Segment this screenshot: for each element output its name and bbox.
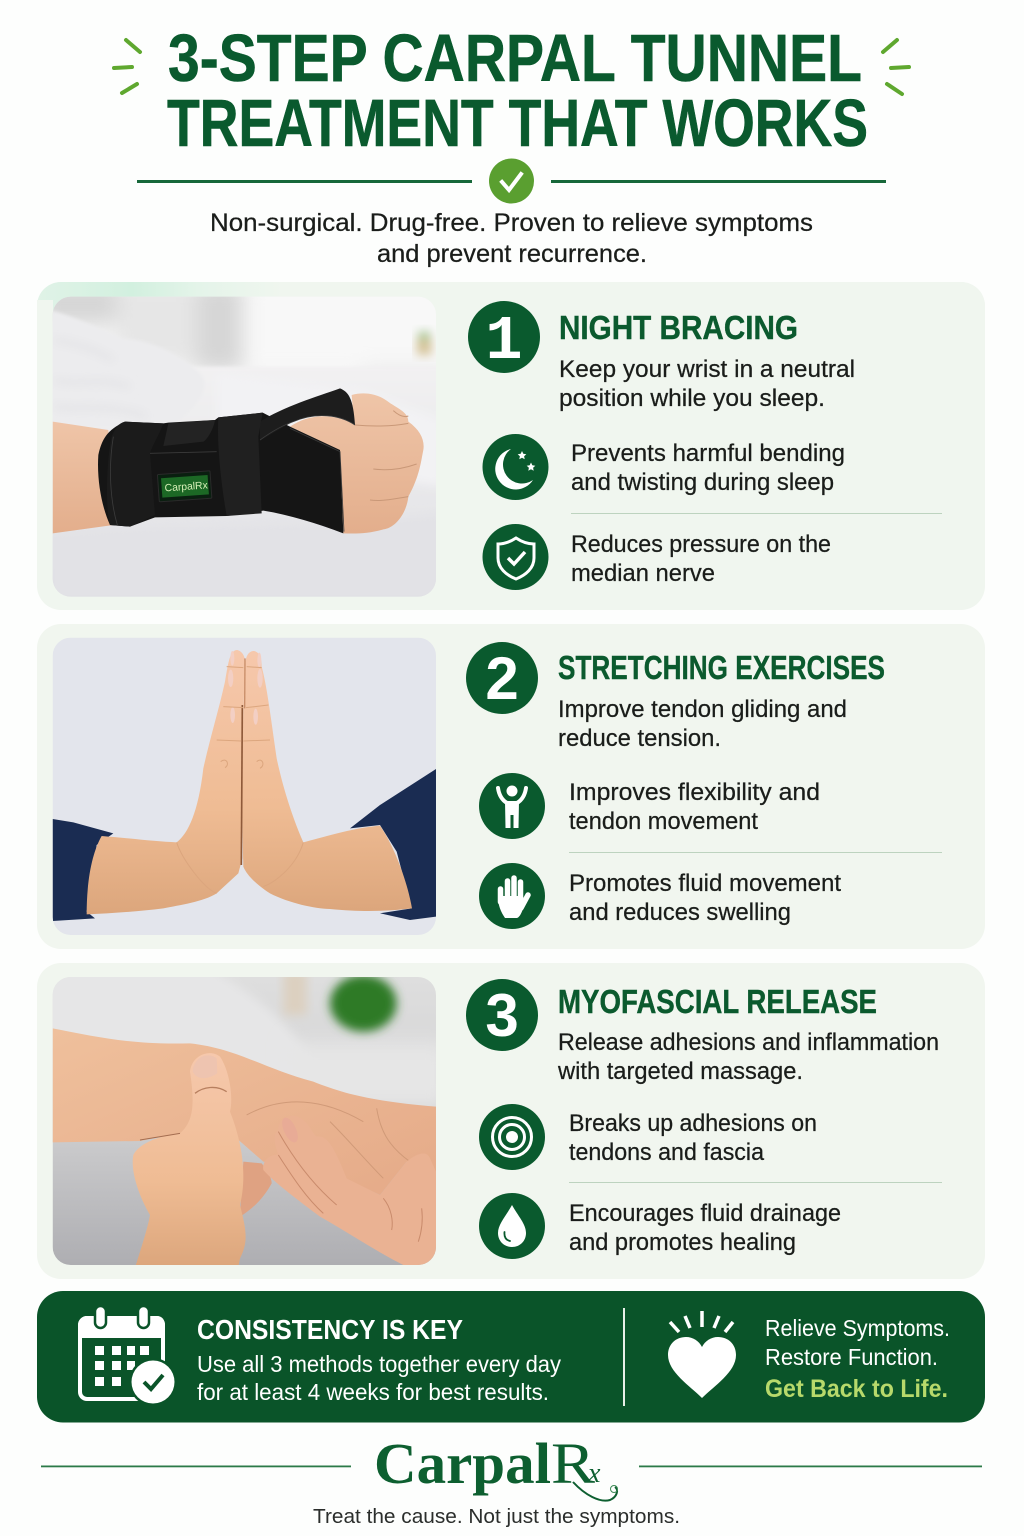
panel: step 1 night bracing [37, 282, 985, 610]
heading: myofascial release: MYOFASCIAL RELEASE [558, 983, 877, 1020]
description [559, 356, 855, 412]
hand [290, 393, 424, 534]
benefit text [571, 440, 845, 496]
benefit text: Breaks up adhesions on [569, 1110, 817, 1137]
benefit text: Encourages fluid drainage [569, 1200, 841, 1227]
benefit text: tendons and fascia [569, 1139, 765, 1166]
arm [53, 422, 113, 533]
wrist [53, 1028, 436, 1195]
benefit text: and reduces swelling [569, 899, 791, 926]
right hand [263, 1154, 436, 1265]
benefit text: median nerve [571, 560, 715, 587]
benefit text [569, 779, 820, 835]
icon: open hand [479, 863, 545, 929]
tagline: Treat the cause. Not just the symptoms. [313, 1506, 680, 1528]
banner heading: CONSISTENCY IS KEY [197, 1314, 463, 1345]
thumb hand [133, 1053, 246, 1267]
icon: target rings [479, 1104, 545, 1170]
description: with targeted massage. [557, 1058, 803, 1085]
banner closing message: Restore Function. [765, 1344, 938, 1370]
benefit text: Promotes fluid movement [569, 870, 841, 897]
icon: left sparks [114, 40, 140, 93]
step badge 3 [466, 979, 538, 1051]
benefit text: Improves flexibility and [569, 779, 820, 806]
icon: calendar with check [78, 1306, 177, 1406]
benefit text: and twisting during sleep [571, 469, 834, 496]
photo: wrist brace on bed [52, 296, 436, 597]
benefit text: Reduces pressure on the [571, 531, 831, 558]
icon: moon and stars [482, 434, 548, 500]
step badge 2 [466, 642, 538, 714]
icon: heart with rays [668, 1311, 736, 1398]
brace [98, 413, 343, 533]
banner closing message: Get Back to Life. [765, 1375, 948, 1403]
banner closing message [765, 1315, 950, 1403]
title [167, 21, 868, 161]
subtitle: and prevent recurrence. [377, 240, 647, 268]
title: TREATMENT THAT WORKS [167, 86, 868, 161]
title divider with check badge [137, 158, 886, 204]
heading: stretching exercises: STRETCHING EXERCISES [558, 649, 885, 686]
subtitle: Non-surgical. Drug-free. Proven to relieve symptoms [210, 209, 813, 237]
benefit text [571, 531, 831, 587]
photo: wrist brace on bed: CarpalRx [164, 480, 209, 494]
logo: CarpalRx: x [587, 1458, 601, 1489]
step badge 1 [468, 301, 540, 377]
description: reduce tension. [558, 725, 721, 752]
description: Improve tendon gliding and [558, 696, 847, 723]
panel: step 3 myofascial release [37, 963, 985, 1279]
step badge 3: 3 [485, 982, 519, 1049]
panel: step 2 stretching [37, 624, 985, 949]
logo: CarpalRx [374, 1431, 618, 1501]
description: Release adhesions and inflammation [558, 1029, 939, 1056]
icon: water drop [479, 1193, 545, 1259]
callout: consistency banner [37, 1291, 985, 1422]
subtitle [210, 209, 813, 268]
description [558, 696, 847, 752]
photo: wrist massage [43, 968, 450, 1267]
description [557, 1029, 939, 1085]
benefit text [569, 1110, 817, 1166]
fingers behind [240, 1162, 272, 1217]
banner text: Use all 3 methods together every day [197, 1351, 561, 1377]
step badge 1: 1 [485, 306, 523, 377]
icon: person arms raised [479, 773, 545, 839]
logo: CarpalRx: Carpal [374, 1431, 551, 1496]
title: 3-STEP CARPAL TUNNEL [168, 21, 862, 96]
benefit text [569, 870, 841, 926]
benefit text: Prevents harmful bending [571, 440, 845, 467]
description: Keep your wrist in a neutral [559, 356, 855, 383]
icon: shield check [482, 524, 548, 590]
description: position while you sleep. [559, 385, 825, 412]
banner closing message: Relieve Symptoms. [765, 1315, 950, 1341]
photo: prayer stretch hands [53, 638, 436, 935]
benefit text [569, 1200, 841, 1256]
benefit text: tendon movement [569, 808, 758, 835]
logo: CarpalRx: R [551, 1431, 595, 1496]
step badge 2: 2 [485, 645, 519, 712]
heading: night bracing: NIGHT BRACING [559, 309, 798, 346]
footer divider lines [41, 1466, 982, 1467]
brace label [157, 471, 212, 502]
icon: right sparks [883, 40, 909, 94]
banner text [197, 1351, 561, 1405]
banner text: for at least 4 weeks for best results. [197, 1379, 549, 1405]
benefit text: and promotes healing [569, 1229, 796, 1256]
